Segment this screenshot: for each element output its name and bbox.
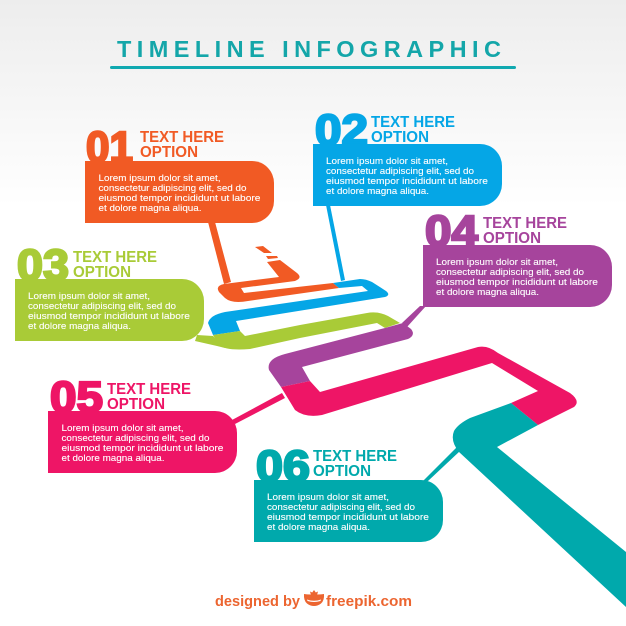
heading 01: TEXT HERE: [140, 129, 224, 146]
connector 06: [423, 447, 460, 481]
box 05: [48, 411, 237, 473]
heading 04: TEXT HERE: [483, 215, 567, 232]
text 04: Lorem ipsum dolor sit amet,: [436, 257, 558, 267]
text 04: eiusmod tempor incididunt ut labore: [436, 277, 598, 287]
text 03: et dolore magna aliqua.: [28, 321, 131, 331]
road segment: orange dashes: [255, 246, 278, 259]
heading 06: TEXT HERE: [313, 448, 397, 465]
road segment 04 purple: [269, 323, 413, 387]
panel: option 06: [254, 442, 460, 542]
text 03: Lorem ipsum dolor sit amet,: [28, 291, 150, 301]
panel: option 02: [313, 106, 502, 281]
text 06: et dolore magna aliqua.: [267, 522, 370, 532]
number 05: 05: [50, 373, 103, 422]
panel: option 05: [48, 373, 285, 473]
heading 01: OPTION: [140, 144, 198, 161]
text 05: et dolore magna aliqua.: [62, 453, 164, 463]
text 05: Lorem ipsum dolor sit amet,: [62, 423, 184, 433]
text 03: eiusmod tempor incididunt ut labore: [28, 311, 190, 321]
text 06: Lorem ipsum dolor sit amet,: [267, 492, 389, 502]
text 03: consectetur adipiscing elit, sed do: [28, 301, 176, 311]
number 01: 01: [86, 123, 133, 172]
text 02: et dolore magna aliqua.: [326, 186, 429, 196]
text 01: et dolore magna aliqua.: [98, 203, 202, 213]
road segment 05 pink: [281, 347, 577, 425]
box 02: [313, 144, 502, 206]
text 05: eiusmod tempor incididunt ut labore: [62, 443, 224, 453]
road segment 01 orange: [218, 260, 339, 302]
text 04: et dolore magna aliqua.: [436, 287, 539, 297]
text 06: consectetur adipiscing elit, sed do: [267, 502, 415, 512]
text 02: eiusmod tempor incididunt ut labore: [326, 176, 488, 186]
heading 03: OPTION: [73, 264, 131, 281]
panel: option 03: [15, 241, 225, 348]
connector 01: [208, 222, 231, 284]
number 03: 03: [17, 241, 69, 290]
title: TIMELINE INFOGRAPHIC: [117, 36, 501, 62]
box 03: [15, 279, 204, 341]
heading 05: TEXT HERE: [107, 381, 191, 398]
connector 02: [326, 205, 345, 281]
number 04: 04: [425, 207, 479, 256]
heading 03: TEXT HERE: [73, 249, 157, 266]
heading 05: OPTION: [107, 396, 165, 413]
heading 04: OPTION: [483, 230, 541, 247]
box 06: [254, 480, 443, 542]
number 02: 02: [315, 106, 368, 155]
heading 02: TEXT HERE: [371, 114, 455, 131]
box 04: [423, 245, 612, 307]
connector 04: [402, 306, 426, 327]
text 06: eiusmod tempor incididunt ut labore: [267, 512, 429, 522]
heading 06: OPTION: [313, 463, 371, 480]
panel: option 04: [402, 207, 612, 327]
footer credit: [215, 590, 412, 610]
connector 05: [232, 393, 285, 424]
text 01: Lorem ipsum dolor sit amet,: [98, 173, 220, 183]
heading 02: OPTION: [371, 129, 429, 146]
panel: option 01: [85, 123, 274, 284]
road segment 03 green: [213, 312, 400, 350]
road segment 02 blue: [208, 279, 388, 335]
designed by text: designed by: [215, 594, 300, 610]
text 04: consectetur adipiscing elit, sed do: [436, 267, 584, 277]
timeline road: [208, 246, 626, 607]
box 01: [85, 161, 274, 223]
text 01: eiusmod tempor incididunt ut labore: [98, 193, 260, 203]
number 06: 06: [256, 442, 310, 491]
icon: freepik logo: [304, 590, 324, 606]
text 05: consectetur adipiscing elit, sed do: [62, 433, 210, 443]
text 02: consectetur adipiscing elit, sed do: [326, 166, 474, 176]
freepik.com text: freepik.com: [326, 594, 412, 610]
connector 03: [195, 335, 225, 348]
text 02: Lorem ipsum dolor sit amet,: [326, 156, 448, 166]
road segment 06 teal: [453, 403, 626, 607]
text 01: consectetur adipiscing elit, sed do: [98, 183, 246, 193]
